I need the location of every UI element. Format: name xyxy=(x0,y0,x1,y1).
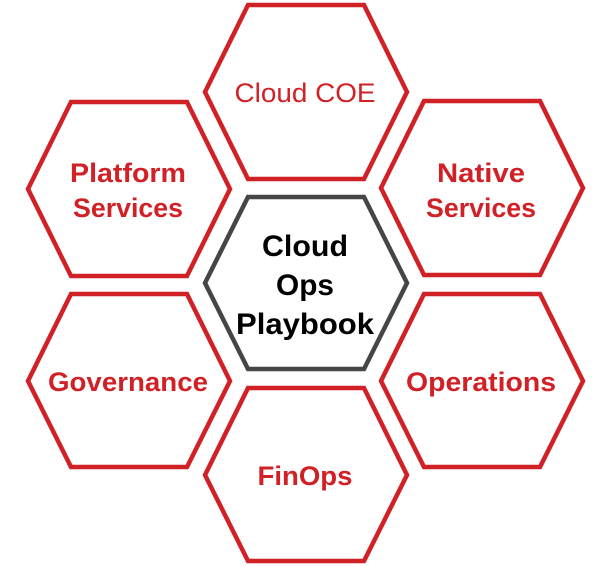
hexagon: Native Services: Services xyxy=(426,193,536,223)
hexagon: Governance: Governance xyxy=(48,367,208,397)
hexagon: Governance xyxy=(28,294,230,467)
hexagon: FinOps: FinOps xyxy=(258,461,352,491)
hexagon: center Cloud Ops Playbook: Ops xyxy=(276,269,334,302)
hexagon: Platform Services xyxy=(28,102,230,276)
hexagon: Native Services: Native xyxy=(437,158,525,188)
hexagon: Cloud COE: Cloud COE xyxy=(234,78,376,108)
hexagon: Operations: Operations xyxy=(406,367,556,397)
hexagon: Platform Services: Platform xyxy=(70,158,186,188)
hexagon: FinOps xyxy=(205,388,407,561)
hexagon: center Cloud Ops Playbook xyxy=(205,197,407,369)
hexagon: Native Services xyxy=(381,101,583,275)
hexagon: Platform Services: Services xyxy=(73,193,183,223)
hexagon: Cloud COE xyxy=(205,5,407,179)
hexagon: center Cloud Ops Playbook: Cloud xyxy=(262,230,348,263)
hexagon: center Cloud Ops Playbook: Playbook xyxy=(236,308,374,341)
hexagon: Operations xyxy=(381,294,583,467)
